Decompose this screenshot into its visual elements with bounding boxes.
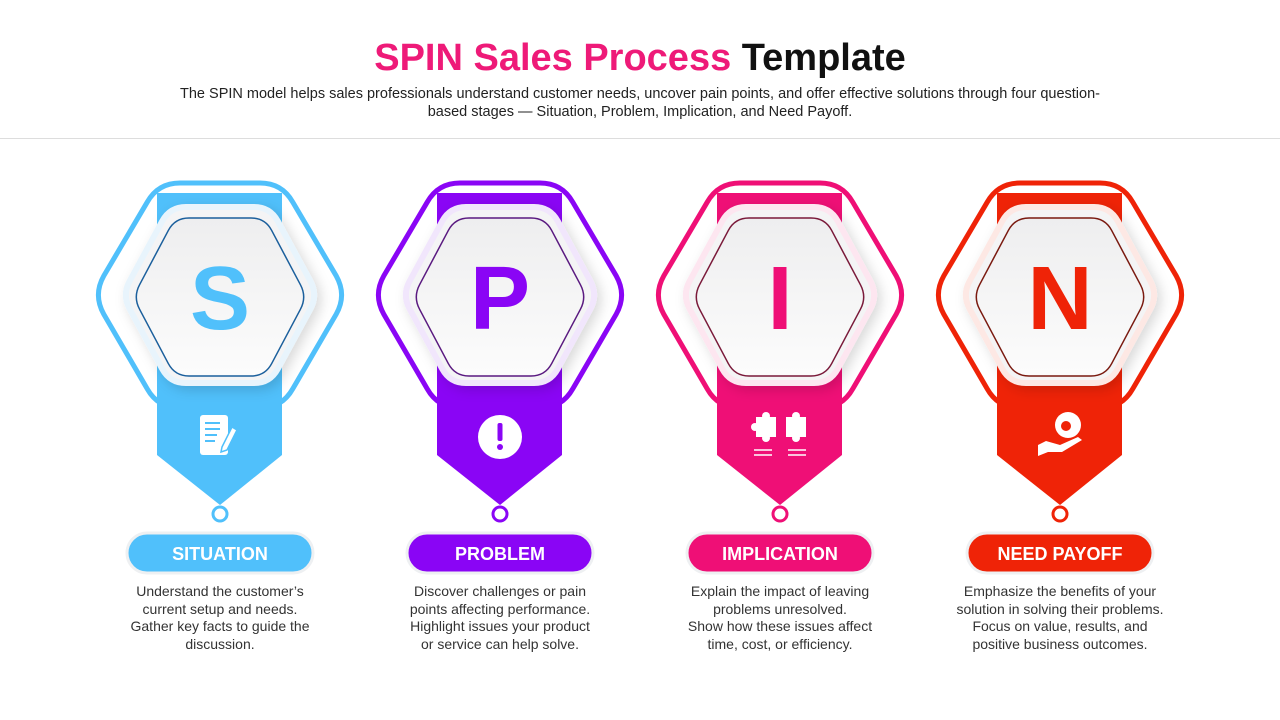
panel: need payoff [938,183,1182,521]
letter P: P [470,249,530,349]
text: implication: Show how these issues affect [688,618,872,634]
pill: problem: PROBLEM [455,544,545,564]
pill: problem [407,533,593,573]
text: need payoff [956,583,1164,652]
text: situation: current setup and needs. [143,600,297,616]
panel: situation [98,183,342,521]
text: situation [130,583,310,652]
text: problem: or service can help solve. [421,636,579,652]
text: problem: points affecting performance. [410,600,590,616]
icon: exclamation [478,415,522,459]
pill: situation [127,533,313,573]
text: need payoff: Emphasize the benefits of your [964,583,1156,599]
pill: need payoff [967,533,1153,573]
icon: document [200,415,237,455]
letter S: S [190,249,250,349]
text: need payoff: solution in solving their problems. [956,600,1164,616]
text: implication: Explain the impact of leaving [691,583,869,599]
pill: implication: IMPLICATION [722,544,838,564]
text: implication: problems unresolved. [713,600,847,616]
pill: implication [687,533,873,573]
text: situation: discussion. [185,636,255,652]
icon: hand with chart [1038,412,1082,456]
pill: need payoff: NEED PAYOFF [997,544,1123,564]
text: need payoff: Focus on value, results, and [972,618,1148,634]
panel: implication [658,183,902,521]
letter N: N [1028,249,1092,349]
pill: situation: SITUATION [172,544,268,564]
text: implication: time, cost, or efficiency. [708,636,852,652]
title: SPIN Sales Process Template [374,37,906,79]
panel: problem [378,183,622,521]
icon: puzzle [751,412,806,455]
subtitle: The SPIN model helps sales professionals understand customer needs, uncover pain points, and offer effective solutions through four question-based stages — Situation, Problem, Implication, and Need Payoff. [180,86,1100,120]
text: situation: Gather key facts to guide the [130,618,310,634]
text: problem: Discover challenges or pain [414,583,586,599]
text: situation: Understand the customer’s [136,583,304,599]
text: implication [688,583,872,652]
text: need payoff: positive business outcomes. [972,636,1148,652]
letter I: I [767,249,793,349]
text: problem [410,583,590,652]
text: problem: Highlight issues your product [410,618,590,634]
